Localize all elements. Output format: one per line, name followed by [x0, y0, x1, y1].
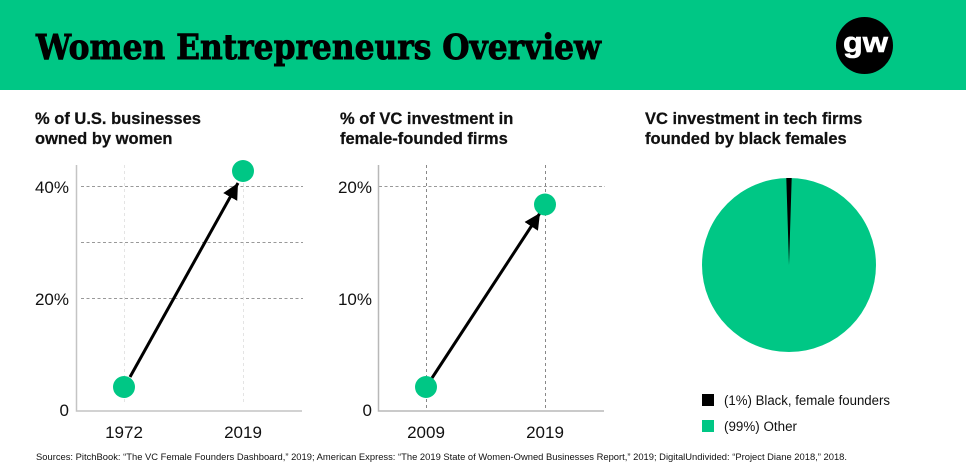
line chart: businesses: 40%: [35, 178, 69, 197]
sources: Sources: PitchBook: “The VC Female Founders Dashboard,” 2019; American Express: “The 2019 State of Women-Owned Businesses Report,” 2019; DigitalUndivided: “Project Diane 2018,” 2018.: [36, 452, 847, 462]
line chart: businesses: 0: [60, 401, 69, 420]
legend: (1%) Black, female founders: [724, 393, 890, 408]
line chart: VC investment: 10%: [338, 290, 372, 309]
line chart: VC investment: 2009: [407, 423, 445, 442]
line chart: businesses: [35, 160, 303, 442]
line chart: VC investment: [338, 165, 605, 442]
title: Women Entrepreneurs Overview: [35, 27, 602, 68]
line chart: VC investment: 2019: [526, 423, 564, 442]
legend: [702, 393, 890, 434]
line chart: VC investment: 0: [363, 401, 372, 420]
line chart: businesses: 20%: [35, 290, 69, 309]
heading: businesses: owned by women: [35, 130, 173, 148]
heading: black females: founded by black females: [645, 130, 847, 148]
heading: VC investment: female-founded firms: [340, 130, 508, 148]
line chart: businesses: 1972: [105, 423, 143, 442]
pie chart: [702, 178, 876, 352]
panel: businesses owned by women: [35, 110, 303, 442]
icon: gw logo: gw: [843, 27, 888, 59]
header band: [0, 0, 966, 90]
line chart: businesses: 2019: [224, 423, 262, 442]
panel: VC investment in female-founded firms: [338, 110, 605, 442]
heading: businesses: % of U.S. businesses: [35, 110, 201, 128]
heading: VC investment: % of VC investment in: [340, 110, 513, 128]
icon: gw logo: [836, 17, 893, 74]
legend: (99%) Other: [724, 419, 797, 434]
heading: black females: VC investment in tech firms: [645, 110, 862, 128]
panel: VC investment by black females: [645, 110, 890, 434]
line chart: VC investment: 20%: [338, 178, 372, 197]
